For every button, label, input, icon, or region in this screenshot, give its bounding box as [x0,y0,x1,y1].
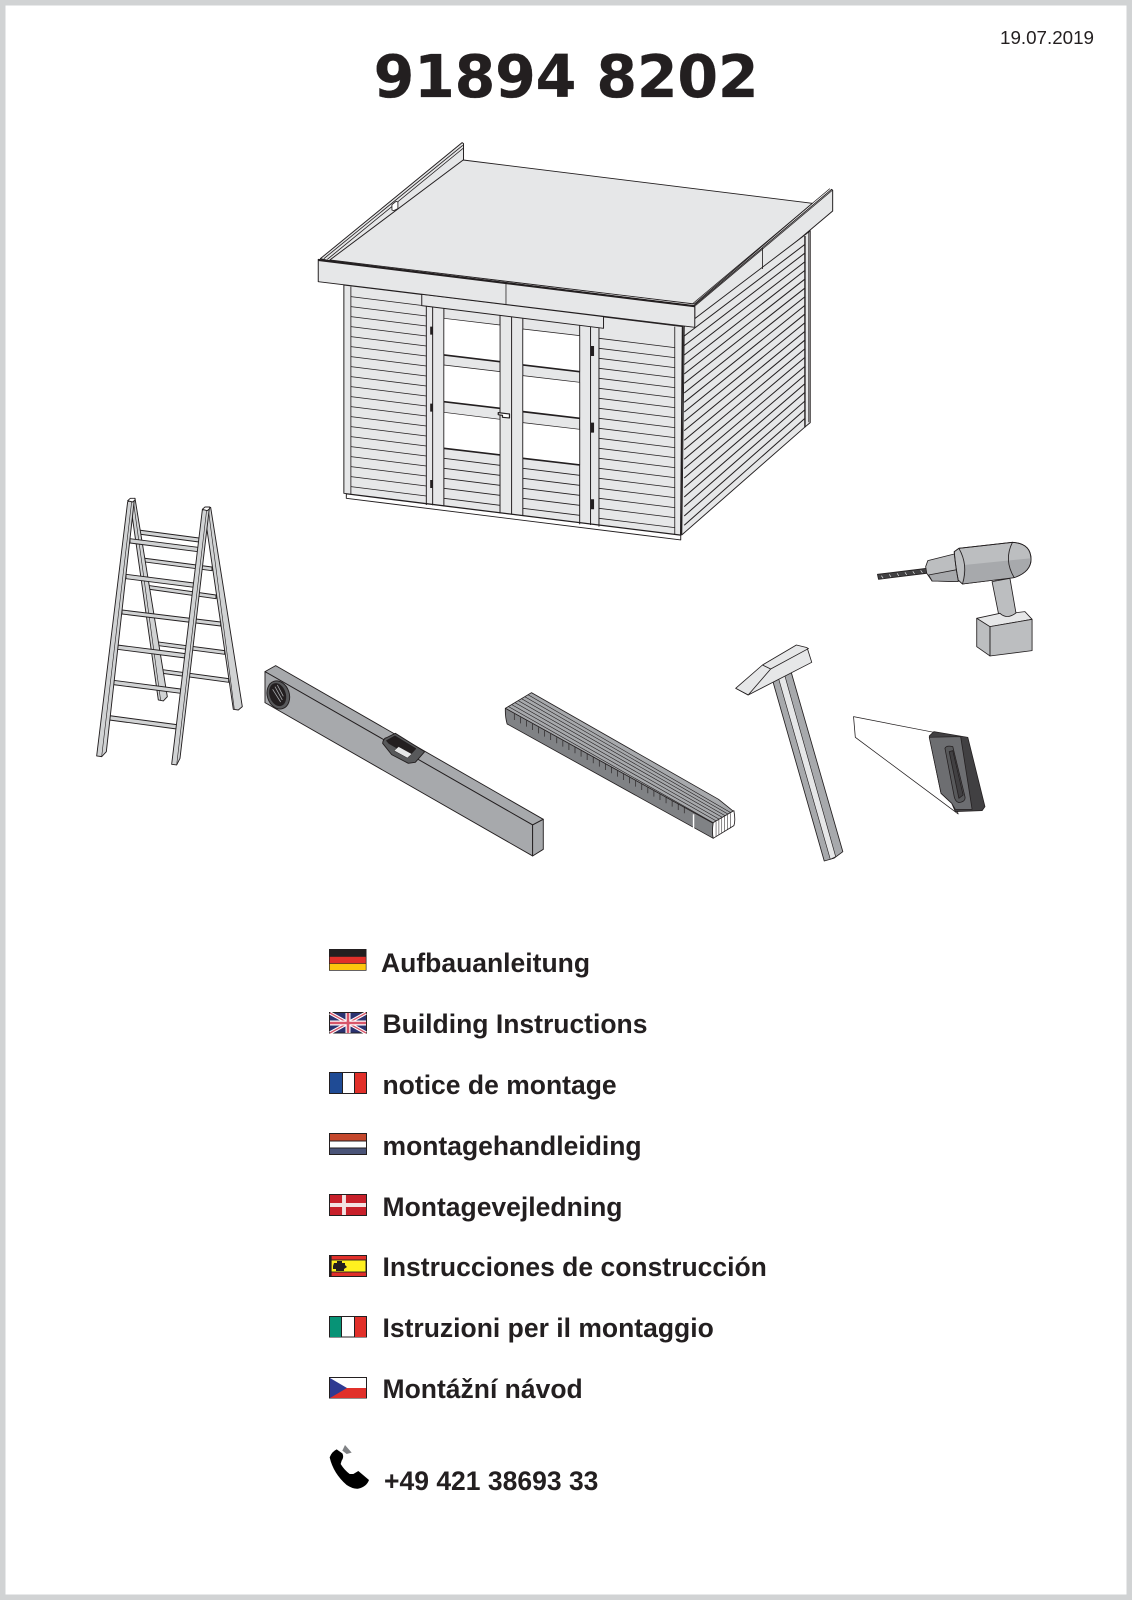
date: 19.07.2019 [1000,27,1094,48]
flag: Spanish [330,1256,366,1276]
flag: German [329,949,366,971]
text: Montážní návod: Montážní návod [382,1374,583,1404]
flag: French [330,1072,366,1094]
icon: telephone [330,1445,369,1489]
illustration: garden shed [318,143,833,540]
flag: Danish [330,1194,366,1216]
illustration: folding rule [505,693,735,838]
illustration: hand saw [854,717,985,814]
flag: Dutch [330,1134,366,1154]
illustration: hammer [736,645,843,861]
text: phone number: +49 421 38693 33 [384,1466,598,1496]
illustration: spirit level [263,666,543,856]
text: Aufbauanleitung: Aufbauanleitung [381,948,590,978]
text: Istruzioni per il montaggio: Istruzioni per il montaggio [382,1313,714,1343]
flag: British [330,1012,366,1033]
text: Building Instructions: Building Instructions [382,1009,648,1039]
flag: Czech [330,1378,366,1398]
title: 91894 8202 [374,43,758,111]
flag: Italian [330,1316,366,1337]
text: Instrucciones de construcción: Instrucciones de construcción [382,1252,767,1282]
illustration: ladder [97,498,242,765]
illustration: cordless drill [877,542,1032,656]
text: notice de montage: notice de montage [382,1070,617,1100]
text: montagehandleiding: montagehandleiding [382,1131,642,1161]
text: Montagevejledning: Montagevejledning [382,1192,622,1222]
